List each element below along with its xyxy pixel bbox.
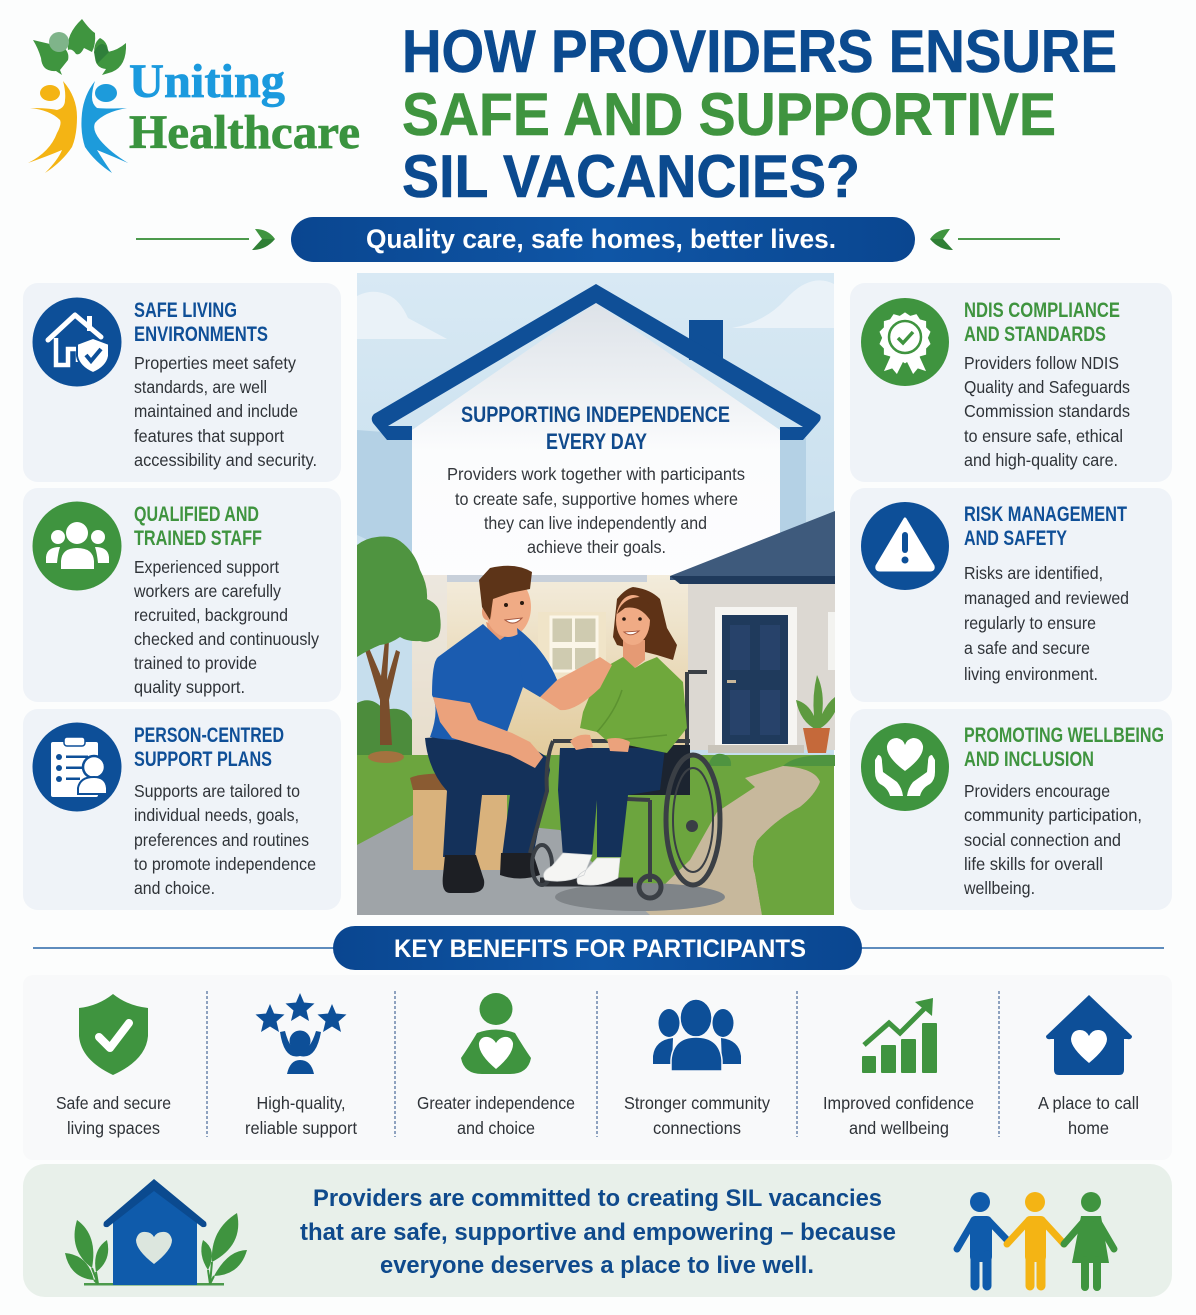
label: Safe and secure [56,1093,171,1113]
heading: NDIS COMPLIANCE [964,299,1120,322]
man's head [479,566,532,637]
label: connections [653,1118,741,1138]
icon: staff group [32,502,122,590]
title: HOW PROVIDERS ENSURE [402,18,1117,85]
woman's neck [623,640,645,668]
sky background [357,273,834,915]
arrow: right leaf arrow [930,229,1060,250]
heading [134,299,268,346]
label: and wellbeing [849,1118,949,1138]
panel: person-centred support plans [23,709,341,910]
body text: Quality and Safeguards [964,377,1130,397]
man's hand on shoulder [540,657,612,710]
label [1038,1093,1139,1138]
woman's shoes [544,853,620,885]
label [624,1093,770,1138]
tagline banner: Quality care, safe homes, better lives. [366,224,836,254]
potted plant [796,675,835,753]
body text: and choice. [134,878,215,898]
body text: features that support [134,426,284,446]
body text: and high-quality care. [964,450,1118,470]
arrow: left leaf arrow [136,229,275,250]
body text: checked and continuously [134,629,319,649]
foreground small bushes [708,754,835,766]
man's sleeve end [517,628,557,697]
heading [134,503,262,550]
label: A place to call [1038,1093,1139,1113]
panel: ndis compliance and standards [850,283,1172,482]
body text: life skills for overall [964,854,1103,874]
closing message: everyone deserves a place to live well. [380,1252,814,1279]
heading: TRAINED STAFF [134,527,262,550]
roof [372,284,821,440]
heading: ENVIRONMENTS [134,323,268,346]
heading: SUPPORT PLANS [134,748,272,771]
body text: to ensure safe, ethical [964,426,1123,446]
body text [964,353,1130,470]
heading [134,724,284,771]
icon: house with heart [1046,995,1132,1075]
body text [963,781,1142,898]
label [417,1093,575,1138]
woman's hands [570,735,630,752]
heading: AND SAFETY [964,527,1067,550]
label [823,1093,974,1138]
heading: EVERY DAY [546,429,647,454]
heading [964,724,1164,771]
lawn detail foreground [753,782,834,915]
body text: standards, are well [134,377,267,397]
closing message: that are safe, supportive and empowering – because [300,1219,896,1246]
icon: hands holding heart [861,723,949,811]
label: reliable support [245,1118,357,1138]
body text [964,563,1129,684]
body text: Experienced support [134,557,279,577]
body text: trained to provide [134,653,257,673]
icon: logo yellow figure [28,81,77,173]
heading [964,299,1120,346]
icon: logo leaves [33,19,126,75]
tagline banner [291,217,915,262]
body text: Commission standards [964,401,1130,421]
logo wordmark Healthcare: Healthcare [129,106,360,159]
icon: shield check [79,994,148,1075]
label: Greater independence [417,1093,575,1113]
large house wall [412,303,780,600]
body text [134,353,317,470]
body text: recruited, background [134,605,288,625]
icon: three people holding hands [957,1192,1114,1287]
man's near arm [433,697,543,768]
benefit: greater independence [417,993,575,1138]
body text: to create safe, supportive homes where [455,489,738,509]
tan path [633,766,820,915]
background bushes [357,700,436,757]
man's neck [486,622,512,642]
label: High-quality, [256,1093,346,1113]
title: SAFE AND SUPPORTIVE [402,81,1056,148]
body text: Risks are identified, [964,563,1103,583]
side blue haze buildings [357,430,806,570]
icon: community group [653,999,741,1071]
body text: maintained and include [134,401,298,421]
icon: rosette badge [861,298,949,386]
man [425,566,557,893]
body text: Properties meet safety [134,353,296,373]
clouds [357,280,834,339]
neighbouring house [670,511,835,753]
body text [447,464,745,557]
heading: PERSON-CENTRED [134,724,284,747]
logo [28,19,360,173]
body text: achieve their goals. [527,537,666,557]
shadow under wheelchair [555,883,725,911]
body text: Providers follow NDIS [964,353,1119,373]
benefit: improved confidence [823,998,974,1138]
benefit: stronger community [624,999,770,1138]
wheelchair [530,672,720,898]
panel: risk management and safety [850,488,1172,702]
heading: SUPPORTING INDEPENDENCE [461,402,730,427]
label: home [1068,1118,1109,1138]
heading: SAFE LIVING [134,299,237,322]
body text: Providers work together with participants [447,464,745,484]
section header: key benefits [33,926,1164,970]
pavement [357,815,650,915]
body text: a safe and secure [964,638,1090,658]
heading: RISK MANAGEMENT [964,503,1127,526]
window [538,612,606,680]
label: Stronger community [624,1093,770,1113]
body text: Supports are tailored to [134,781,300,801]
icon: house with shield [32,298,122,386]
body text: regularly to ensure [964,613,1096,633]
tree [357,536,441,763]
body text: to promote independence [134,854,316,874]
woman [517,587,687,885]
woman's trousers [558,748,665,857]
bottom banner [23,1164,1172,1297]
body text: they can live independently and [484,513,707,533]
body text [133,557,319,697]
label: and choice [457,1118,535,1138]
benefits background [23,975,1172,1160]
benefit: high-quality support [245,993,357,1138]
benefit: place to call home [1038,995,1139,1138]
lawn [357,755,834,915]
panel: safe living environments [23,283,341,482]
section header: key benefits: KEY BENEFITS FOR PARTICIPANTS [394,935,806,963]
closing message [300,1185,896,1279]
body text: living environment. [964,664,1098,684]
heading: QUALIFIED AND [134,503,259,526]
heading [461,402,730,454]
logo wordmark Uniting: Uniting [129,55,285,108]
body text: wellbeing. [963,878,1035,898]
icon: growth chart [862,998,937,1073]
heading: AND INCLUSION [964,748,1094,771]
label [56,1093,171,1138]
woman's face [616,595,651,645]
central illustration [357,273,835,915]
icon: stars and person [256,993,346,1074]
body text: managed and reviewed [964,588,1129,608]
lower beige wall [412,575,690,755]
box seat [410,773,508,870]
panel: promoting wellbeing and inclusion [850,709,1172,910]
body text: accessibility and security. [134,450,317,470]
woman's sweater [580,657,687,753]
benefit: safe and secure [56,994,171,1138]
man's polo [430,624,557,740]
man's trousers [425,732,550,857]
body text: individual needs, goals, [134,805,299,825]
body text: social connection and [964,830,1121,850]
woman's hair [613,587,677,660]
panel: qualified and trained staff [23,488,341,702]
heading [964,503,1127,550]
icon: logo blue figure [81,81,128,173]
title [402,18,1117,210]
closing message: Providers are committed to creating SIL vacancies [313,1185,882,1212]
heading: AND STANDARDS [964,323,1106,346]
title: SIL VACANCIES? [402,143,860,210]
label [245,1093,357,1138]
body text [134,781,316,898]
body text: preferences and routines [134,830,309,850]
label: Improved confidence [823,1093,974,1113]
label: living spaces [67,1118,160,1138]
icon: person with heart [461,993,531,1074]
man's shoes [443,853,540,893]
body text: community participation, [964,805,1142,825]
body text: Providers encourage [964,781,1110,801]
body text: quality support. [134,677,245,697]
icon: warning triangle [861,502,949,590]
icon: house with heart and plants [65,1179,247,1286]
body text: workers are carefully [133,581,281,601]
icon: clipboard with person [32,722,122,812]
